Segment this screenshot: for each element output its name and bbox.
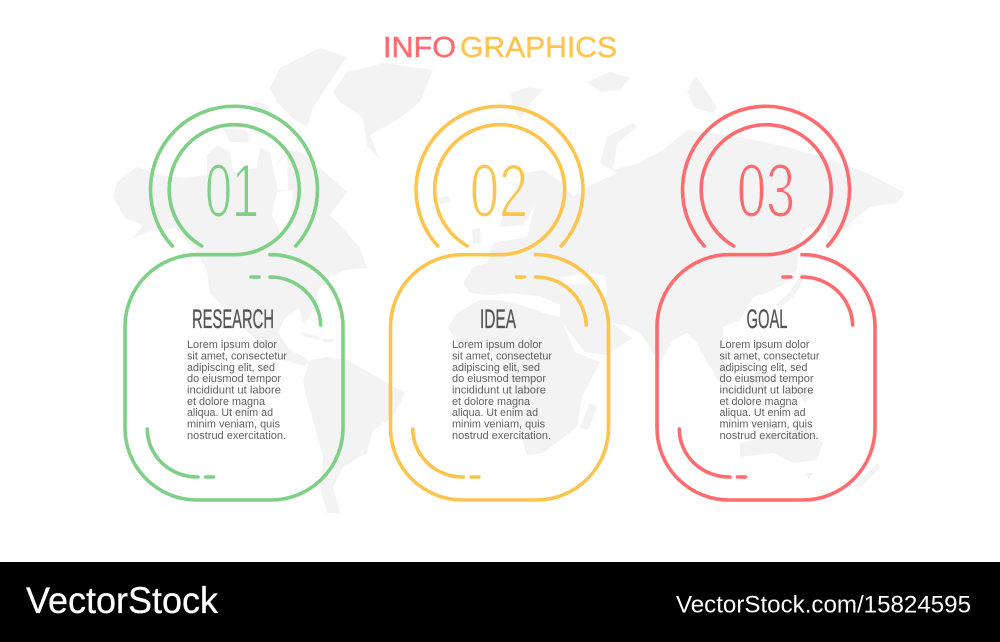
title: GRAPHICS	[460, 32, 617, 64]
title	[383, 32, 617, 64]
body text, step 2: nostrud exercitation.	[452, 430, 551, 442]
panel: 03 goal	[657, 106, 875, 500]
body text, step 3: sit amet, consectetur	[720, 350, 820, 362]
body text, step 3: adipiscing elit, sed	[720, 362, 808, 374]
outline: circle and rounded card, step 2	[390, 125, 609, 500]
title: INFO	[383, 32, 456, 64]
body text, step 1: Lorem ipsum dolor	[187, 339, 277, 351]
outer arc, step 2	[416, 106, 583, 246]
outer arc, step 3	[682, 106, 850, 246]
body text, step 1: aliqua. Ut enim ad	[187, 407, 273, 419]
outline: circle and rounded card, step 1	[125, 125, 343, 500]
body text, step 1: adipiscing elit, sed	[187, 362, 275, 374]
heading: research: RESEARCH	[192, 304, 274, 334]
body text, step 3: aliqua. Ut enim ad	[720, 407, 806, 419]
body text, step 3: do eiusmod tempor	[720, 373, 814, 385]
body text, step 2: sit amet, consectetur	[452, 350, 552, 362]
body text, step 2	[452, 339, 552, 442]
footer logo: VectorStock	[26, 580, 218, 621]
inner accents, step 1	[147, 277, 321, 477]
map seas	[272, 155, 607, 306]
body text, step 2: adipiscing elit, sed	[452, 362, 540, 374]
body text, step 2: Lorem ipsum dolor	[452, 339, 542, 351]
body text, step 1: do eiusmod tempor	[187, 373, 281, 385]
body text, step 3: minim veniam, quis	[720, 419, 813, 431]
body text, step 2: et dolore magna	[452, 396, 531, 408]
heading: goal: GOAL	[746, 304, 788, 334]
body text, step 1	[187, 339, 287, 442]
body text, step 3: et dolore magna	[720, 396, 798, 408]
number 03: 03	[737, 149, 795, 234]
body text, step 2: minim veniam, quis	[452, 419, 545, 431]
footer url: VectorStock.com/15824595	[676, 592, 971, 618]
body text, step 2: do eiusmod tempor	[452, 373, 546, 385]
body text, step 3: nostrud exercitation.	[720, 430, 818, 442]
inner accents, step 3	[679, 277, 853, 477]
body text, step 1: incididunt ut labore	[187, 384, 281, 396]
body text, step 3	[720, 339, 820, 442]
number 01: 01	[205, 149, 259, 234]
body text, step 3: incididunt ut labore	[720, 384, 814, 396]
panel: 01 research	[125, 106, 343, 500]
body text, step 1: sit amet, consectetur	[187, 350, 287, 362]
number 02: 02	[470, 149, 528, 234]
map islands and africa	[437, 72, 880, 487]
panel: 02 idea	[390, 106, 609, 500]
body text, step 2: aliqua. Ut enim ad	[452, 407, 538, 419]
outer arc, step 1	[150, 106, 318, 246]
body text, step 1: minim veniam, quis	[187, 419, 280, 431]
footer bar	[0, 562, 1000, 642]
body text, step 3: Lorem ipsum dolor	[720, 339, 810, 351]
heading: idea: IDEA	[480, 304, 516, 334]
inner accents, step 2	[413, 277, 586, 477]
world map background	[100, 48, 905, 513]
outline: circle and rounded card, step 3	[657, 125, 875, 500]
body text, step 2: incididunt ut labore	[452, 384, 546, 396]
body text, step 1: nostrud exercitation.	[187, 430, 286, 442]
body text, step 1: et dolore magna	[187, 396, 266, 408]
